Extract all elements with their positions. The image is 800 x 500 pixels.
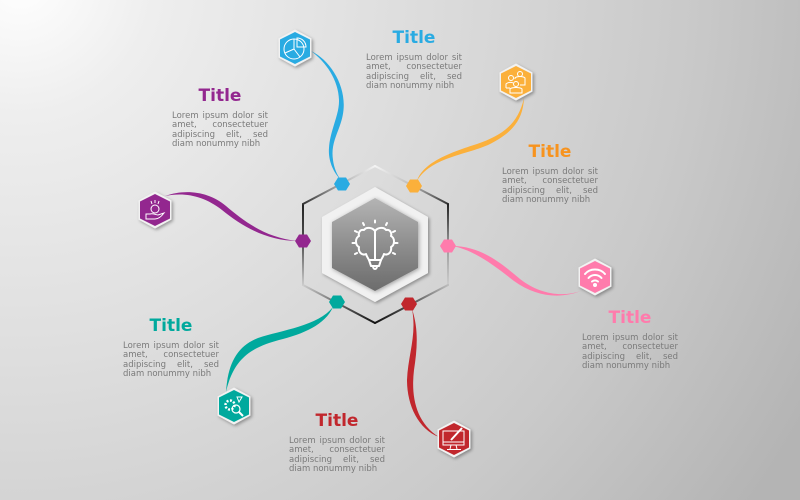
node: blue bbox=[334, 178, 350, 190]
text: orange: adipiscing elit, sed bbox=[502, 186, 598, 196]
text: blue: Lorem ipsum dolor sit bbox=[366, 52, 462, 62]
title: blue: Title bbox=[393, 28, 435, 48]
icon badge: monitor and brush bbox=[438, 420, 470, 458]
text: blue: diam nonummy nibh bbox=[366, 81, 454, 91]
text: teal bbox=[123, 340, 219, 379]
text: orange: diam nonummy nibh bbox=[502, 195, 590, 205]
text: pink: Lorem ipsum dolor sit bbox=[582, 332, 678, 342]
icon badge: team bbox=[500, 64, 532, 100]
text: pink: diam nonummy nibh bbox=[582, 361, 670, 371]
ribbon: orange bbox=[417, 98, 524, 181]
text: pink bbox=[582, 332, 678, 371]
text: orange: amet, consectetuer bbox=[502, 176, 598, 186]
icon badge: pie chart bbox=[278, 30, 312, 66]
title: orange: Title bbox=[529, 142, 571, 162]
icon badge: wifi bbox=[578, 258, 612, 296]
text: teal: amet, consectetuer bbox=[123, 350, 219, 360]
text: purple: amet, consectetuer bbox=[172, 120, 268, 130]
node: teal bbox=[329, 296, 345, 308]
title: red: Title bbox=[316, 411, 358, 431]
text: teal: Lorem ipsum dolor sit bbox=[123, 340, 219, 350]
text: blue: amet, consectetuer bbox=[366, 62, 462, 72]
text: red: Lorem ipsum dolor sit bbox=[289, 436, 385, 446]
ribbon: red bbox=[407, 309, 439, 437]
node: pink bbox=[440, 240, 456, 252]
text: blue bbox=[366, 52, 462, 91]
text: red: diam nonummy nibh bbox=[289, 464, 377, 474]
text: pink: adipiscing elit, sed bbox=[582, 352, 678, 362]
text: purple: adipiscing elit, sed bbox=[172, 130, 268, 140]
text: blue: adipiscing elit, sed bbox=[366, 72, 462, 82]
text: red: adipiscing elit, sed bbox=[289, 454, 385, 464]
node: red bbox=[401, 298, 417, 310]
icon: brain light bulb bbox=[352, 220, 398, 269]
text: red: amet, consectetuer bbox=[289, 445, 385, 455]
text: purple bbox=[172, 110, 268, 149]
text: teal: adipiscing elit, sed bbox=[123, 360, 219, 370]
ribbon: teal bbox=[226, 307, 333, 392]
icon badge: money in hand bbox=[138, 192, 172, 228]
text: pink: amet, consectetuer bbox=[582, 342, 678, 352]
ribbon: purple bbox=[165, 192, 298, 241]
title: purple: Title bbox=[199, 86, 241, 106]
node: orange bbox=[406, 180, 422, 192]
central white hexagon bbox=[322, 187, 428, 302]
outer hexagon ring bbox=[303, 166, 448, 323]
text: red bbox=[289, 436, 385, 474]
title: teal: Title bbox=[150, 316, 192, 336]
text: orange bbox=[502, 166, 598, 205]
icon badge: gear and magnifier bbox=[218, 388, 250, 424]
central grey hexagon bbox=[332, 198, 418, 291]
node: purple bbox=[295, 234, 311, 248]
text: orange: Lorem ipsum dolor sit bbox=[502, 166, 598, 176]
title: pink: Title bbox=[609, 308, 651, 328]
ribbon: blue bbox=[311, 51, 344, 180]
text: teal: diam nonummy nibh bbox=[123, 369, 211, 379]
text: purple: diam nonummy nibh bbox=[172, 139, 260, 149]
ribbon: pink bbox=[452, 246, 581, 296]
text: purple: Lorem ipsum dolor sit bbox=[172, 110, 268, 120]
